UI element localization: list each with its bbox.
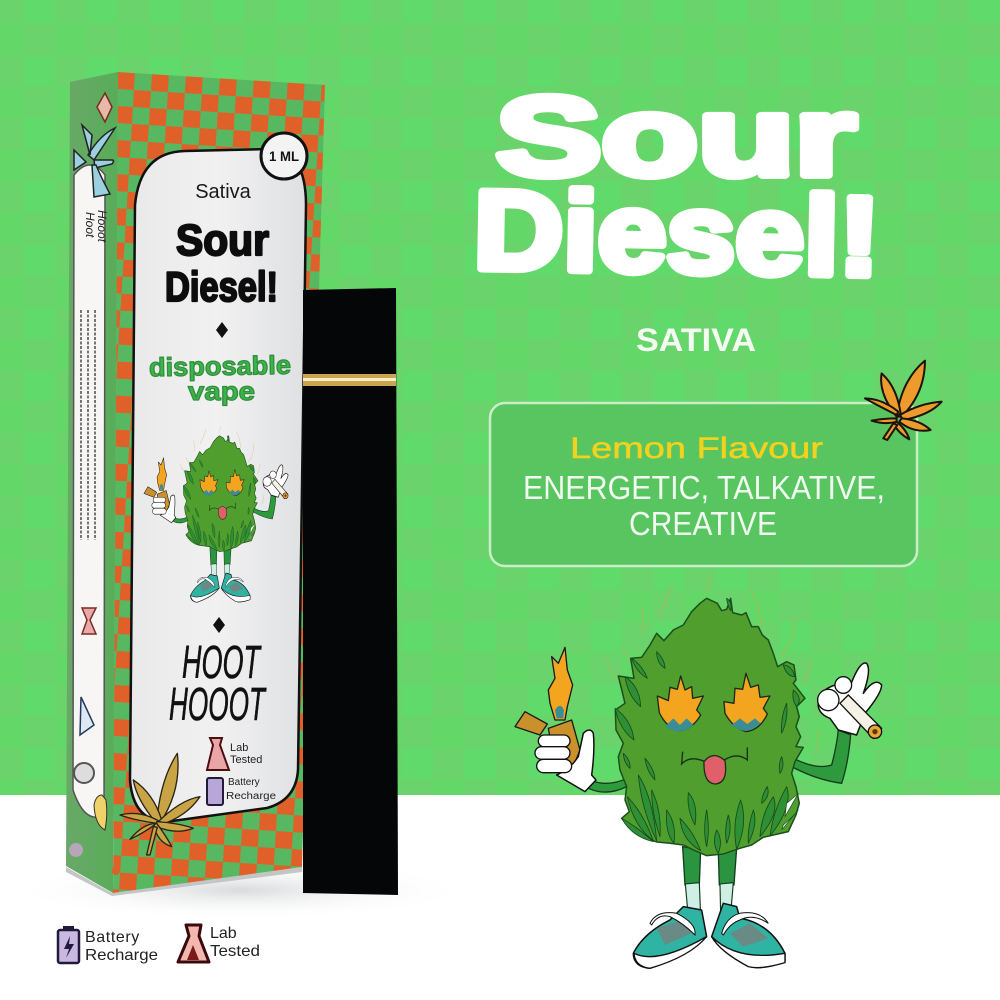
Hoot Hooot logo: HOOOT (169, 678, 267, 730)
side brand text line two: Hooot (95, 210, 109, 243)
box title: Diesel! (165, 263, 278, 310)
diamond ornament lower (213, 617, 225, 633)
box side face (66, 72, 118, 893)
flavour label: Lemon Flavour (570, 432, 823, 465)
box title: Sour (176, 216, 269, 265)
side star icon (74, 125, 115, 197)
side brand text: Hoot (83, 212, 97, 238)
white front panel (130, 149, 306, 822)
mini character (144, 426, 288, 602)
box battery recharge: Battery (228, 777, 260, 788)
floor shadow (10, 860, 470, 920)
disposable vape text (149, 350, 291, 406)
orange cannabis leaf (865, 361, 942, 440)
side fine print (81, 310, 95, 540)
main title: Sour (496, 74, 856, 199)
mascot character (515, 577, 882, 968)
bottom icon: battery recharge: Battery (85, 929, 140, 946)
box front face (113, 72, 325, 893)
effects line two: CREATIVE (629, 505, 777, 542)
box lab tested (207, 738, 262, 770)
diamond ornament (216, 322, 228, 338)
effects line one: ENERGETIC, TALKATIVE, (523, 469, 885, 506)
bottom icon: lab tested: Lab (210, 925, 237, 942)
box bottom flap (66, 867, 302, 896)
1 ML badge (261, 133, 307, 179)
Hoot Hooot logo (169, 636, 267, 730)
flavour panel (490, 403, 917, 566)
box lab tested: Tested (230, 754, 262, 766)
main title (473, 74, 881, 299)
main title: Diesel! (473, 167, 881, 299)
vape device (303, 288, 398, 895)
bottom icon: lab tested: Tested (210, 943, 260, 960)
bottom icon: battery recharge (58, 926, 158, 964)
box battery recharge (207, 777, 277, 805)
bottom icon: battery recharge: Recharge (85, 947, 158, 964)
SATIVA subtitle: SATIVA (636, 322, 756, 358)
side icons (69, 608, 120, 875)
1 ML badge: 1 ML (269, 148, 299, 164)
disposable vape text: disposable (149, 350, 291, 382)
box battery recharge: Recharge (226, 791, 277, 802)
box title (165, 216, 278, 310)
product box (66, 72, 325, 896)
green checkered background (0, 0, 1000, 795)
box lab tested: Lab (230, 742, 248, 754)
side diamond (97, 93, 112, 122)
vape gold band (303, 374, 396, 386)
Hoot Hooot logo: HOOT (182, 636, 262, 688)
disposable vape text: vape (188, 376, 255, 406)
Sativa label: Sativa (195, 181, 252, 203)
tan cannabis leaf (120, 753, 200, 855)
vape body (303, 288, 398, 895)
bottom icon: lab tested (178, 925, 260, 962)
side panel (73, 165, 105, 817)
